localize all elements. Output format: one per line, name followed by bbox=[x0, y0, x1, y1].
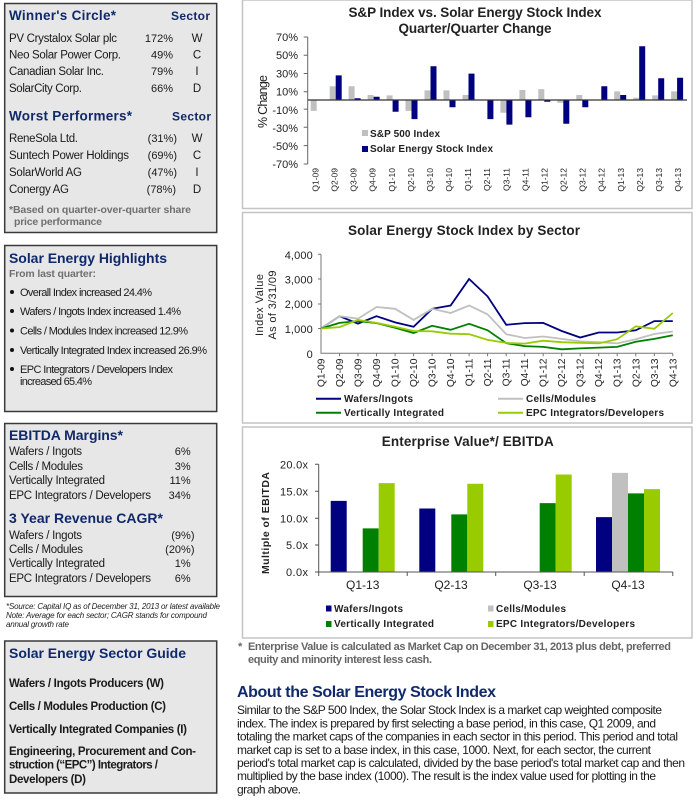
about text block: graph above. bbox=[237, 782, 301, 796]
category labels: Q4-13 bbox=[611, 578, 645, 592]
heading: worst performers: Sector bbox=[172, 110, 211, 124]
footnote: enterprise value: Enterprise Value is calculated as Market Cap on December 31, 2013 plus debt, preferred bbox=[248, 641, 671, 653]
y axis labels bbox=[285, 250, 313, 361]
table: worst performers: C bbox=[193, 150, 201, 162]
chart title: Enterprise Value*/ EBITDA bbox=[382, 434, 554, 449]
heading: revenue CAGR: 3 Year Revenue CAGR* bbox=[9, 510, 164, 526]
table: revenue CAGR: 6% bbox=[175, 573, 191, 585]
heading: highlights: Solar Energy Highlights bbox=[9, 250, 167, 266]
x axis labels bbox=[310, 168, 683, 192]
x axis labels bbox=[316, 358, 679, 387]
footnote: share price basis: *Based on quarter-over-quarter share bbox=[9, 204, 191, 216]
table: winners: I bbox=[195, 66, 199, 78]
y axis labels: 1,000 bbox=[285, 324, 313, 336]
x axis labels: Q4-11 bbox=[520, 168, 530, 191]
x axis labels: Q3-10 bbox=[425, 168, 435, 192]
bars: vertically integrated bbox=[363, 493, 644, 572]
x axis labels: Q2-13 bbox=[635, 168, 645, 192]
x axis labels: Q2-09 bbox=[335, 358, 346, 387]
S&P 500 bars bbox=[311, 86, 677, 113]
sector guide items: Vertically Integrated Companies (I) bbox=[9, 724, 187, 736]
x axis labels: Q1-09 bbox=[310, 168, 320, 192]
table: EBITDA margins: 34% bbox=[169, 490, 191, 502]
panel: S&P vs solar bar chart bbox=[242, 0, 692, 208]
table: revenue CAGR: Wafers / Ingots bbox=[9, 530, 82, 542]
sector guide items: Engineering, Procurement and Con- bbox=[9, 746, 196, 758]
chart title: S&P Index vs. Solar Energy Stock Index bbox=[348, 5, 602, 20]
footnote: enterprise value bbox=[238, 641, 671, 666]
table: worst performers: W bbox=[192, 133, 203, 145]
sector guide items: struction (“EPC”) Integrators / bbox=[9, 760, 159, 772]
source note: annual growth rate bbox=[6, 620, 70, 629]
source note bbox=[6, 602, 221, 629]
x axis labels: Q3-12 bbox=[578, 168, 588, 192]
table: revenue CAGR: EPC Integrators / Developers bbox=[9, 573, 151, 585]
line: EPC integrators/developers bbox=[321, 313, 673, 344]
y axis labels: -50% bbox=[272, 141, 298, 153]
chart title: Quarter/Quarter Change bbox=[398, 21, 552, 36]
legend: Vertically Integrated bbox=[334, 619, 434, 630]
x axis labels: Q2-11 bbox=[482, 168, 492, 191]
sector guide items: Wafers / Ingots Producers (W) bbox=[9, 678, 164, 690]
table: revenue CAGR: Vertically Integrated bbox=[9, 558, 105, 570]
x axis labels: Q2-10 bbox=[409, 358, 420, 387]
panel: EV/EBITDA bar chart bbox=[242, 427, 692, 638]
sector guide items: Cells / Modules Production (C) bbox=[9, 701, 166, 713]
table: EBITDA margins: Cells / Modules bbox=[9, 461, 83, 473]
y axis title bbox=[254, 270, 279, 340]
about text block bbox=[237, 703, 685, 796]
bullet list: increased 65.4% bbox=[20, 376, 92, 388]
source note: Note: Average for each sector; CAGR stands for compound bbox=[6, 611, 208, 620]
zero line bbox=[308, 99, 687, 101]
category labels: Q2-13 bbox=[434, 578, 468, 592]
x axis labels: Q2-11 bbox=[483, 358, 494, 386]
table: revenue CAGR: (20%) bbox=[165, 544, 194, 556]
x axis labels: Q4-09 bbox=[372, 358, 383, 387]
x axis labels: Q4-12 bbox=[597, 168, 607, 192]
heading: sector guide: Solar Energy Sector Guide bbox=[9, 645, 186, 661]
bullet list: Wafers / Ingots Index increased 1.4% bbox=[20, 306, 181, 318]
table: EBITDA margins: EPC Integrators / Developers bbox=[9, 490, 151, 502]
y axis labels: 15.0x bbox=[280, 486, 308, 498]
legend: Vertically Integrated bbox=[344, 408, 444, 419]
category labels: Q3-13 bbox=[523, 578, 557, 592]
bullet list: Cells / Modules Index increased 12.9% bbox=[20, 326, 188, 338]
table: winners: Canadian Solar Inc. bbox=[9, 66, 104, 78]
bars: cells/modules bbox=[612, 473, 628, 572]
about text block: totaling the market caps of the companies in each sector in this period. This period and total bbox=[237, 730, 678, 744]
y axis labels: 70% bbox=[276, 32, 298, 44]
y axis labels bbox=[272, 32, 298, 171]
panel: solar energy highlights bbox=[5, 246, 217, 412]
x axis labels: Q2-12 bbox=[557, 358, 568, 387]
table: worst performers: (69%) bbox=[148, 150, 177, 162]
table: EBITDA margins: Vertically Integrated bbox=[9, 475, 105, 487]
about text block: index. The index is prepared by first selecting a base period, in this case, Q1 2009, and bbox=[237, 716, 656, 730]
x axis labels: Q3-10 bbox=[428, 358, 439, 387]
table: worst performers: Conergy AG bbox=[9, 184, 69, 196]
subheading: From last quarter: bbox=[9, 268, 96, 280]
x axis labels: Q4-13 bbox=[668, 358, 679, 387]
y axis labels: -10% bbox=[272, 105, 298, 117]
table: winners: Neo Solar Power Corp. bbox=[9, 50, 121, 62]
legend: EPC Integrators/Developers bbox=[496, 619, 635, 630]
table: worst performers: (47%) bbox=[148, 167, 177, 179]
table: revenue CAGR: 1% bbox=[175, 558, 191, 570]
y axis labels: 10.0x bbox=[280, 514, 308, 526]
table: revenue CAGR: Cells / Modules bbox=[9, 544, 83, 556]
table: winners: PV Crystalox Solar plc bbox=[9, 33, 117, 45]
x axis labels: Q1-10 bbox=[387, 168, 397, 192]
x axis labels: Q3-11 bbox=[502, 358, 513, 386]
y axis title: Index Value bbox=[254, 274, 266, 336]
x axis labels: Q4-13 bbox=[673, 168, 683, 192]
y axis title: As of 3/31/09 bbox=[267, 270, 279, 340]
line: cells/modules bbox=[321, 306, 673, 343]
legend bbox=[316, 394, 664, 419]
x axis labels: Q4-11 bbox=[520, 358, 531, 386]
axes bbox=[304, 37, 308, 164]
x axis labels: Q1-13 bbox=[616, 168, 626, 192]
y axis labels: 0.0x bbox=[286, 567, 308, 579]
heading: EBITDA margins: EBITDA Margins* bbox=[9, 427, 124, 443]
y axis title: Multiple of EBITDA bbox=[260, 472, 272, 574]
bullet list bbox=[10, 287, 207, 388]
y axis labels: 3,000 bbox=[285, 274, 313, 286]
chart title bbox=[348, 5, 602, 36]
y axis labels: -30% bbox=[272, 123, 298, 135]
legend bbox=[326, 604, 635, 630]
category labels: Q1-13 bbox=[346, 578, 380, 592]
y axis labels: 20.0x bbox=[280, 460, 308, 472]
x axis labels: Q3-09 bbox=[354, 358, 364, 387]
panel: sector line chart bbox=[242, 212, 692, 423]
heading: winner's circle bbox=[9, 8, 210, 23]
legend: Cells/Modules bbox=[526, 394, 596, 405]
x axis labels: Q2-12 bbox=[558, 168, 568, 192]
table: EBITDA margins bbox=[9, 446, 191, 502]
heading: worst performers bbox=[9, 108, 211, 124]
table: winners: 172% bbox=[145, 33, 173, 45]
x axis labels: Q4-12 bbox=[594, 358, 605, 387]
y axis labels: 30% bbox=[276, 68, 298, 80]
table: worst performers: Suntech Power Holdings bbox=[9, 150, 129, 162]
legend bbox=[362, 129, 493, 155]
footnote: enterprise value: * bbox=[238, 641, 243, 653]
line: vertically integrated bbox=[321, 321, 673, 349]
table: EBITDA margins: 6% bbox=[175, 446, 191, 458]
legend: Cells/Modules bbox=[496, 604, 566, 615]
table: worst performers: SolarWorld AG bbox=[9, 167, 82, 179]
x axis labels: Q2-10 bbox=[406, 168, 416, 192]
legend: Solar Energy Stock Index bbox=[370, 144, 493, 155]
category labels bbox=[346, 578, 645, 592]
table: worst performers bbox=[9, 133, 203, 196]
table: winners: C bbox=[193, 50, 201, 62]
panel: winners and worst performers bbox=[5, 4, 217, 232]
y axis title: % Change bbox=[256, 75, 270, 128]
y axis labels: 0 bbox=[307, 349, 313, 361]
about text block: market cap is set to a base index, in this case, 1000. Next, for each sector, the current bbox=[237, 743, 652, 757]
bullet list: Overall Index increased 24.4% bbox=[20, 287, 152, 299]
table: worst performers: I bbox=[195, 167, 199, 179]
table: EBITDA margins: Wafers / Ingots bbox=[9, 446, 82, 458]
y axis labels: 50% bbox=[276, 50, 298, 62]
table: winners: SolarCity Corp. bbox=[9, 83, 82, 95]
panel: margins and revenue growth bbox=[5, 424, 217, 596]
heading: worst performers: Worst Performers* bbox=[9, 108, 133, 124]
table: worst performers: (31%) bbox=[148, 133, 177, 145]
x axis labels: Q1-11 bbox=[465, 358, 476, 386]
footnote: share price basis bbox=[9, 204, 191, 228]
bars: EPC integrators/developers bbox=[379, 474, 660, 572]
x axis labels: Q3-11 bbox=[501, 168, 511, 191]
heading: winner's circle: Winner's Circle* bbox=[9, 8, 117, 23]
legend: Wafers/Ingots bbox=[344, 394, 413, 405]
table: revenue CAGR: (9%) bbox=[171, 530, 194, 542]
table: worst performers: D bbox=[193, 184, 201, 196]
table: winners bbox=[9, 33, 203, 95]
x axis labels: Q3-13 bbox=[654, 168, 664, 192]
axes bbox=[315, 464, 673, 576]
sector guide items: Developers (D) bbox=[9, 774, 86, 786]
bullet list: Vertically Integrated Index increased 26.9% bbox=[20, 345, 207, 357]
y axis labels: 10% bbox=[276, 86, 298, 98]
x axis labels: Q3-12 bbox=[576, 358, 587, 387]
y axis labels bbox=[280, 460, 308, 579]
x axis labels: Q3-13 bbox=[650, 358, 661, 387]
legend: EPC Integrators/Developers bbox=[526, 408, 664, 419]
y axis labels: 2,000 bbox=[285, 299, 313, 311]
x axis labels: Q4-10 bbox=[446, 358, 457, 387]
line: wafers/ingots bbox=[321, 279, 673, 338]
about text block: period's total market cap is calculated, divided by the base period's total market cap and then bbox=[237, 756, 685, 770]
table: worst performers: ReneSola Ltd. bbox=[9, 133, 78, 145]
x axis labels: Q4-09 bbox=[368, 168, 378, 192]
x axis labels: Q1-09 bbox=[316, 358, 328, 387]
table: winners: D bbox=[193, 83, 201, 95]
y axis labels: 5.0x bbox=[286, 540, 308, 552]
footnote: enterprise value: equity and minority interest less cash. bbox=[248, 654, 432, 666]
x axis labels: Q1-11 bbox=[463, 168, 473, 191]
x axis labels: Q1-13 bbox=[613, 358, 624, 387]
about text block: multiplied by the base index (1000). The result is the index value used for plotting in the bbox=[237, 769, 656, 783]
table: winners: 49% bbox=[151, 50, 173, 62]
x axis labels: Q2-09 bbox=[330, 168, 340, 192]
table: winners: 66% bbox=[151, 83, 173, 95]
table: EBITDA margins: 3% bbox=[175, 461, 191, 473]
x axis labels: Q1-10 bbox=[391, 358, 402, 387]
x axis labels: Q1-12 bbox=[539, 358, 550, 387]
sector guide items bbox=[9, 678, 196, 786]
x axis labels: Q1-12 bbox=[540, 168, 550, 192]
table: winners: W bbox=[192, 33, 203, 45]
heading: about the index: About the Solar Energy Stock Index bbox=[237, 684, 496, 701]
footnote: share price basis: price performance bbox=[14, 216, 102, 228]
source note: *Source: Capital IQ as of December 31, 2013 or latest available bbox=[6, 602, 221, 611]
panel: sector guide bbox=[5, 641, 217, 793]
x axis labels: Q3-09 bbox=[349, 168, 359, 192]
bars: wafers/ingots bbox=[331, 501, 612, 572]
bullet list: EPC Integrators / Developers Index bbox=[20, 364, 174, 376]
table: winners: 79% bbox=[151, 66, 173, 78]
table: worst performers: (78%) bbox=[147, 184, 176, 196]
x axis labels: Q2-13 bbox=[631, 358, 642, 387]
y axis labels: 4,000 bbox=[285, 250, 313, 262]
table: revenue CAGR bbox=[9, 530, 194, 585]
y axis labels: -70% bbox=[272, 159, 298, 171]
legend: S&P 500 Index bbox=[370, 129, 440, 140]
table: EBITDA margins: 11% bbox=[169, 475, 191, 487]
chart title: Solar Energy Stock Index by Sector bbox=[348, 223, 581, 238]
solar index bars bbox=[336, 46, 683, 125]
axes bbox=[318, 254, 673, 356]
about text block: Similar to the S&P 500 Index, the Solar Stock Index is a market cap weighted composite bbox=[237, 703, 662, 717]
legend: Wafers/Ingots bbox=[334, 604, 403, 615]
heading: winner's circle: Sector bbox=[171, 9, 210, 23]
x axis labels: Q4-10 bbox=[444, 168, 454, 192]
